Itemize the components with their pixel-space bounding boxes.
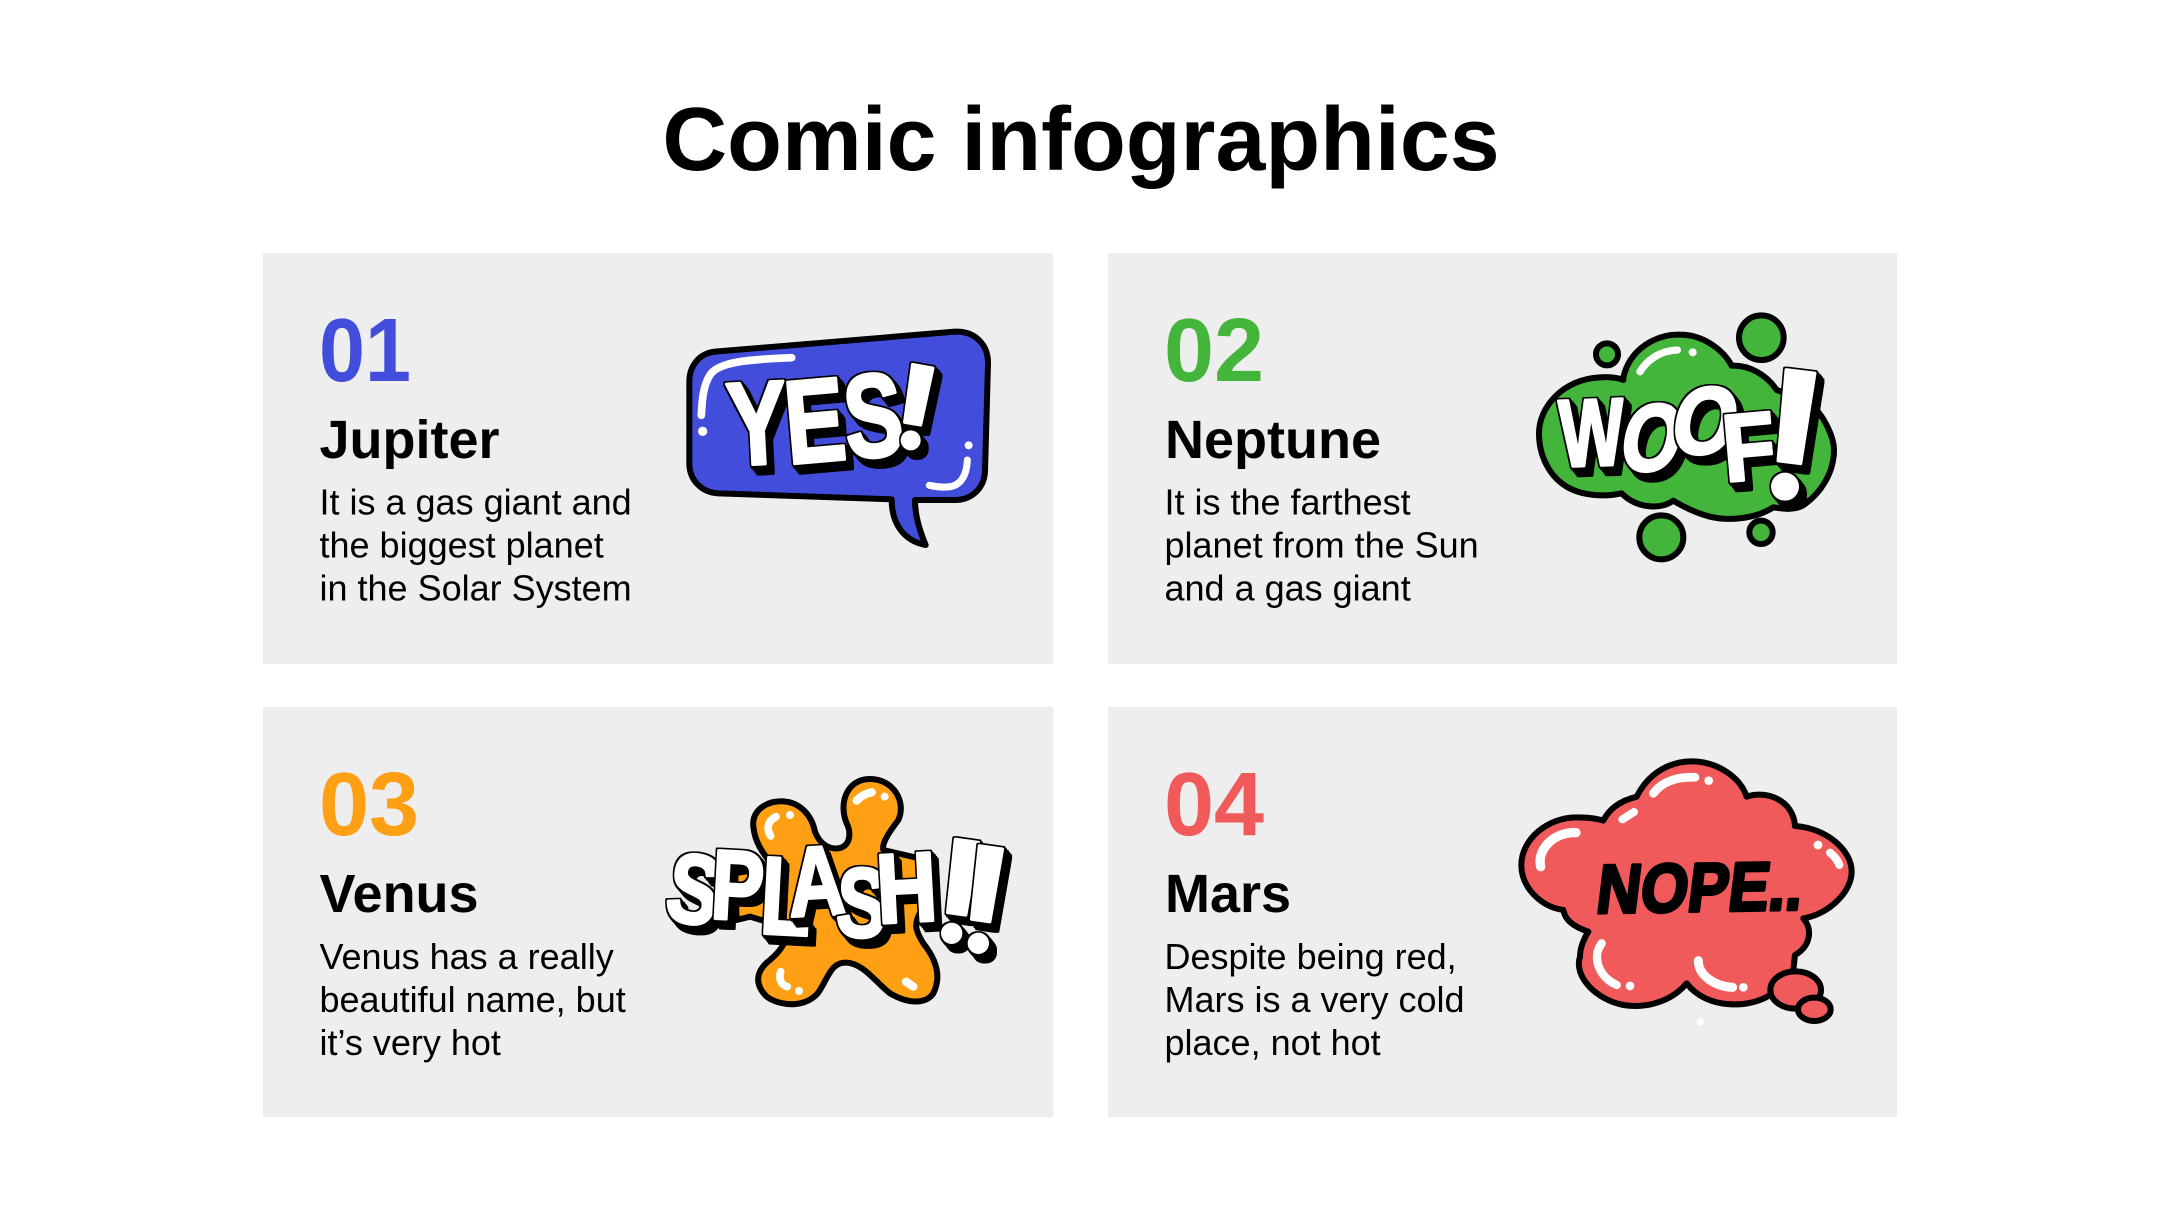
heading: Venus: Venus <box>320 864 479 924</box>
lettering: YES! <box>723 361 942 476</box>
description: Jupiter: in the Solar System <box>320 568 632 608</box>
lettering: WOOF! <box>1555 366 1824 506</box>
panel: Venus <box>263 707 1053 1117</box>
panel: Mars <box>1108 707 1897 1117</box>
lettering: WOOF!: O <box>1665 367 1747 474</box>
bubbles <box>1596 315 1784 559</box>
lettering: WOOF!: ! <box>1747 328 1838 546</box>
lettering: YES!: S <box>838 348 908 485</box>
lettering: WOOF!: O <box>1613 385 1691 491</box>
title: Comic infographics <box>662 90 1500 190</box>
description: Neptune: planet from the Sun <box>1164 524 1479 566</box>
lettering: NOPE..: NOPE.. <box>1593 847 1808 928</box>
lettering: SPLASH!!!: ! <box>921 805 998 982</box>
number 03: 03 <box>319 755 419 855</box>
lettering: SPLASH!!!: ! <box>945 812 1022 989</box>
thought tail <box>1770 971 1831 1021</box>
description: Jupiter: It is a gas giant and <box>320 482 632 522</box>
heading: Jupiter: Jupiter <box>320 410 500 470</box>
lettering: YES!: E <box>779 353 850 490</box>
description: Neptune: It is the farthest <box>1164 482 1411 522</box>
description: Venus: it’s very hot <box>320 1022 501 1063</box>
panel: Neptune <box>1108 253 1897 664</box>
description: Mars: Mars is a very cold <box>1164 979 1465 1020</box>
heading: Neptune: Neptune <box>1165 410 1381 470</box>
lettering: SPLASH!!!: A <box>785 824 848 937</box>
panel: Jupiter <box>263 253 1053 664</box>
number 01: 01 <box>319 301 411 401</box>
icon: SPLASH blob <box>659 779 1022 1004</box>
lettering: YES!: Y <box>724 357 790 491</box>
lettering: WOOF!: W <box>1557 378 1626 487</box>
icon: NOPE thought cloud <box>1521 761 1852 1026</box>
lettering: SPLASH!!! <box>665 836 1012 964</box>
description: Mars: Despite being red, <box>1164 936 1457 977</box>
description: Venus: beautiful name, but <box>320 979 626 1020</box>
icon: YES speech bubble <box>689 332 988 545</box>
number 04: 04 <box>1164 755 1264 855</box>
highlights <box>1540 776 1839 1026</box>
lettering: WOOF!: F <box>1718 392 1780 503</box>
description: Venus: Venus has a really <box>320 936 614 977</box>
description: Mars: place, not hot <box>1164 1022 1381 1063</box>
highlights <box>698 358 973 487</box>
highlights <box>768 792 913 995</box>
lettering: SPLASH!!!: S <box>659 830 729 948</box>
lettering: YES!: ! <box>881 336 950 478</box>
description: Jupiter: the biggest planet <box>320 524 604 566</box>
lettering: SPLASH!!!: P <box>709 829 767 942</box>
lettering: SPLASH!!!: H <box>874 832 940 945</box>
lettering: SPLASH!!!: L <box>758 834 814 959</box>
highlights <box>1640 348 1697 372</box>
heading: Mars: Mars <box>1165 864 1291 924</box>
lettering: SPLASH!!!: S <box>834 847 890 959</box>
icon: WOOF burst <box>1539 315 1838 559</box>
description: Neptune: and a gas giant <box>1164 568 1411 608</box>
number 02: 02 <box>1164 301 1264 401</box>
